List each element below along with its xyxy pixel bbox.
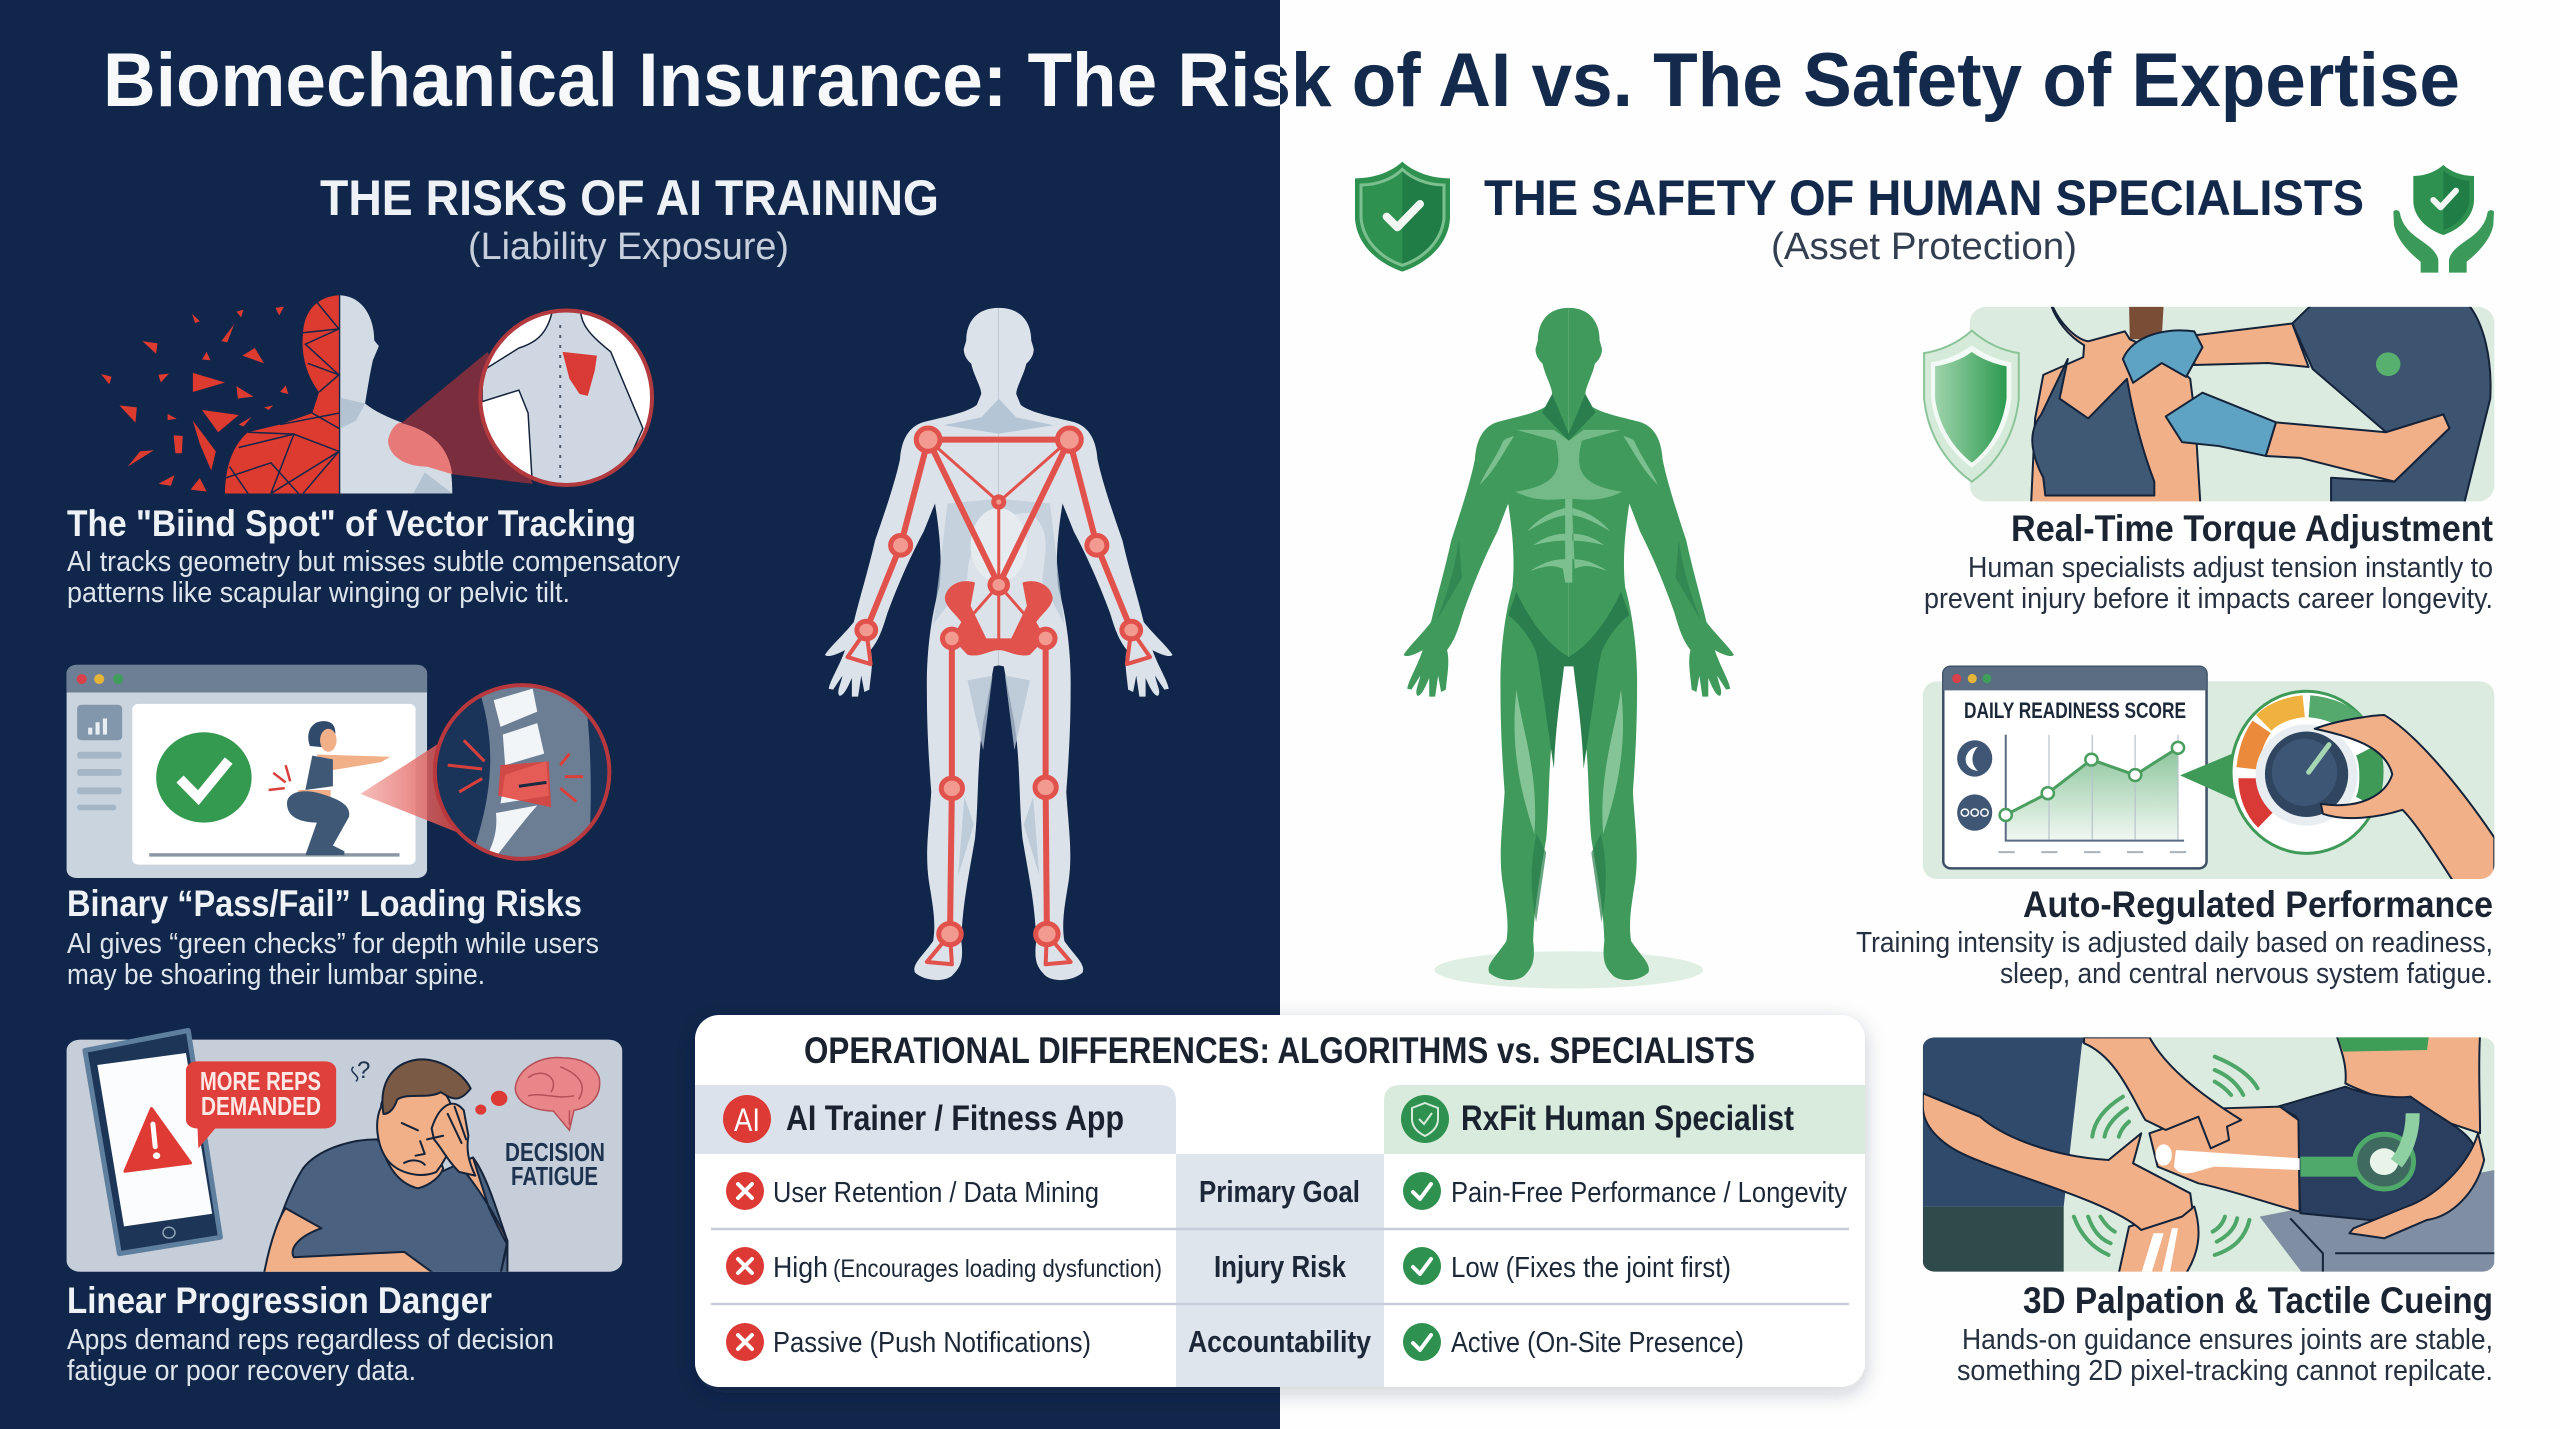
center column — [1176, 1154, 1384, 1387]
icon: hands holding shield — [2393, 165, 2494, 273]
row: accountability: Passive (Push Notifications) — [773, 1327, 1091, 1359]
illustration: app window with squat and lumbar magnifier — [67, 665, 609, 878]
left column heading — [320, 170, 939, 268]
illustration: specialist adjusting shoulder — [1924, 304, 2494, 505]
panel: binary pass/fail loading risks — [67, 665, 609, 991]
body text: may be shoaring their lumbar spine. — [67, 959, 485, 991]
left column heading: (Liability Exposure) — [468, 226, 789, 268]
ground shadow — [1434, 951, 1703, 988]
body text — [1856, 927, 2493, 990]
column header: AI trainer — [695, 1085, 1176, 1154]
table card — [695, 1015, 1865, 1387]
body text: fatigue or poor recovery data. — [67, 1355, 416, 1387]
heading: The "Biind Spot" of Vector Tracking — [67, 503, 636, 544]
column header: AI trainer: AI — [734, 1102, 760, 1138]
table title: OPERATIONAL DIFFERENCES: ALGORITHMS vs. SPECIALISTS — [804, 1030, 1755, 1071]
illustration: fragmenting body with scapula magnifier — [101, 295, 652, 493]
body text: Human specialists adjust tension instantly to — [1968, 552, 2493, 584]
left column heading: THE RISKS OF AI TRAINING — [320, 170, 939, 226]
background: navy left half — [0, 0, 1280, 1429]
body text: Training intensity is adjusted daily based on readiness, — [1856, 927, 2493, 959]
body text — [1957, 1324, 2493, 1387]
row: accountability: Active (On-Site Presence) — [1451, 1327, 1744, 1359]
panel: blind spot of vector tracking — [67, 295, 680, 609]
body text: something 2D pixel-tracking cannot repilcate. — [1957, 1355, 2493, 1387]
body text: prevent injury before it impacts career longevity. — [1924, 583, 2493, 615]
column header: AI trainer: AI Trainer / Fitness App — [786, 1099, 1124, 1138]
figure: healthy green body — [1404, 308, 1734, 988]
row: primary goal — [726, 1172, 1847, 1210]
body text: Apps demand reps regardless of decision — [67, 1324, 554, 1356]
body text — [67, 1324, 554, 1387]
heading: Binary “Pass/Fail” Loading Risks — [67, 883, 582, 924]
illustration: phone alert and fatigued user: MORE REPS — [200, 1066, 321, 1096]
row: injury risk — [726, 1247, 1731, 1285]
right column heading: THE SAFETY OF HUMAN SPECIALISTS — [1484, 170, 2364, 226]
panel: auto-regulated performance — [1856, 667, 2494, 990]
heading: 3D Palpation & Tactile Cueing — [2023, 1280, 2493, 1321]
panel: linear progression danger — [67, 1031, 622, 1387]
body text — [67, 928, 599, 991]
heading: Auto-Regulated Performance — [2023, 884, 2493, 925]
panel: operational differences comparison table — [695, 1015, 1865, 1387]
body text: AI tracks geometry but misses subtle compensatory — [67, 546, 680, 578]
row: accountability — [726, 1323, 1744, 1361]
body text: patterns like scapular winging or pelvic tilt. — [67, 577, 570, 609]
column header: human specialist — [1384, 1085, 1865, 1154]
row: injury risk: (Encourages loading dysfunction) — [833, 1255, 1162, 1283]
row: injury risk: High — [773, 1252, 828, 1284]
column header: human specialist: RxFit Human Specialist — [1461, 1099, 1794, 1138]
icon: shield with check — [1355, 162, 1450, 272]
illustration: readiness dashboard and dial — [1923, 667, 2494, 885]
body text: Hands-on guidance ensures joints are stable, — [1962, 1324, 2493, 1356]
row: accountability: Accountability — [1188, 1324, 1372, 1359]
row: primary goal: Pain-Free Performance / Longevity — [1451, 1177, 1847, 1209]
row: primary goal: User Retention / Data Mining — [773, 1177, 1099, 1209]
row: primary goal: Primary Goal — [1199, 1174, 1360, 1209]
illustration: phone alert and fatigued user: DECISION — [505, 1137, 605, 1167]
body text — [1924, 552, 2493, 615]
right column heading: (Asset Protection) — [1771, 226, 2077, 268]
illustration: phone alert and fatigued user: DEMANDED — [201, 1091, 321, 1121]
heading: Linear Progression Danger — [67, 1280, 492, 1321]
dashboard label: DAILY READINESS SCORE — [1964, 698, 2186, 723]
heading: Real-Time Torque Adjustment — [2011, 508, 2493, 549]
illustration: phone alert and fatigued user: ? — [357, 1057, 370, 1084]
panel: 3D palpation and tactile cueing — [1923, 1035, 2494, 1387]
row: injury risk: Low (Fixes the joint first) — [1451, 1252, 1731, 1284]
body text: sleep, and central nervous system fatigue. — [2000, 958, 2493, 990]
panel: real-time torque adjustment — [1924, 304, 2494, 615]
illustration: phone alert and fatigued user: FATIGUE — [511, 1161, 598, 1191]
illustration: phone alert and fatigued user — [67, 1031, 622, 1274]
body text — [67, 546, 680, 609]
figure: AI skeleton tracking body — [825, 308, 1172, 980]
body text: AI gives “green checks” for depth while users — [67, 928, 599, 960]
right column heading — [1484, 170, 2364, 268]
illustration: hands on knee with signal arcs — [1923, 1035, 2494, 1273]
title: Biomechanical Insurance: The Risk of AI vs. The Safety of Expertise — [103, 38, 2460, 123]
row: injury risk: Injury Risk — [1214, 1249, 1347, 1284]
background: white right half — [1280, 0, 2560, 1429]
